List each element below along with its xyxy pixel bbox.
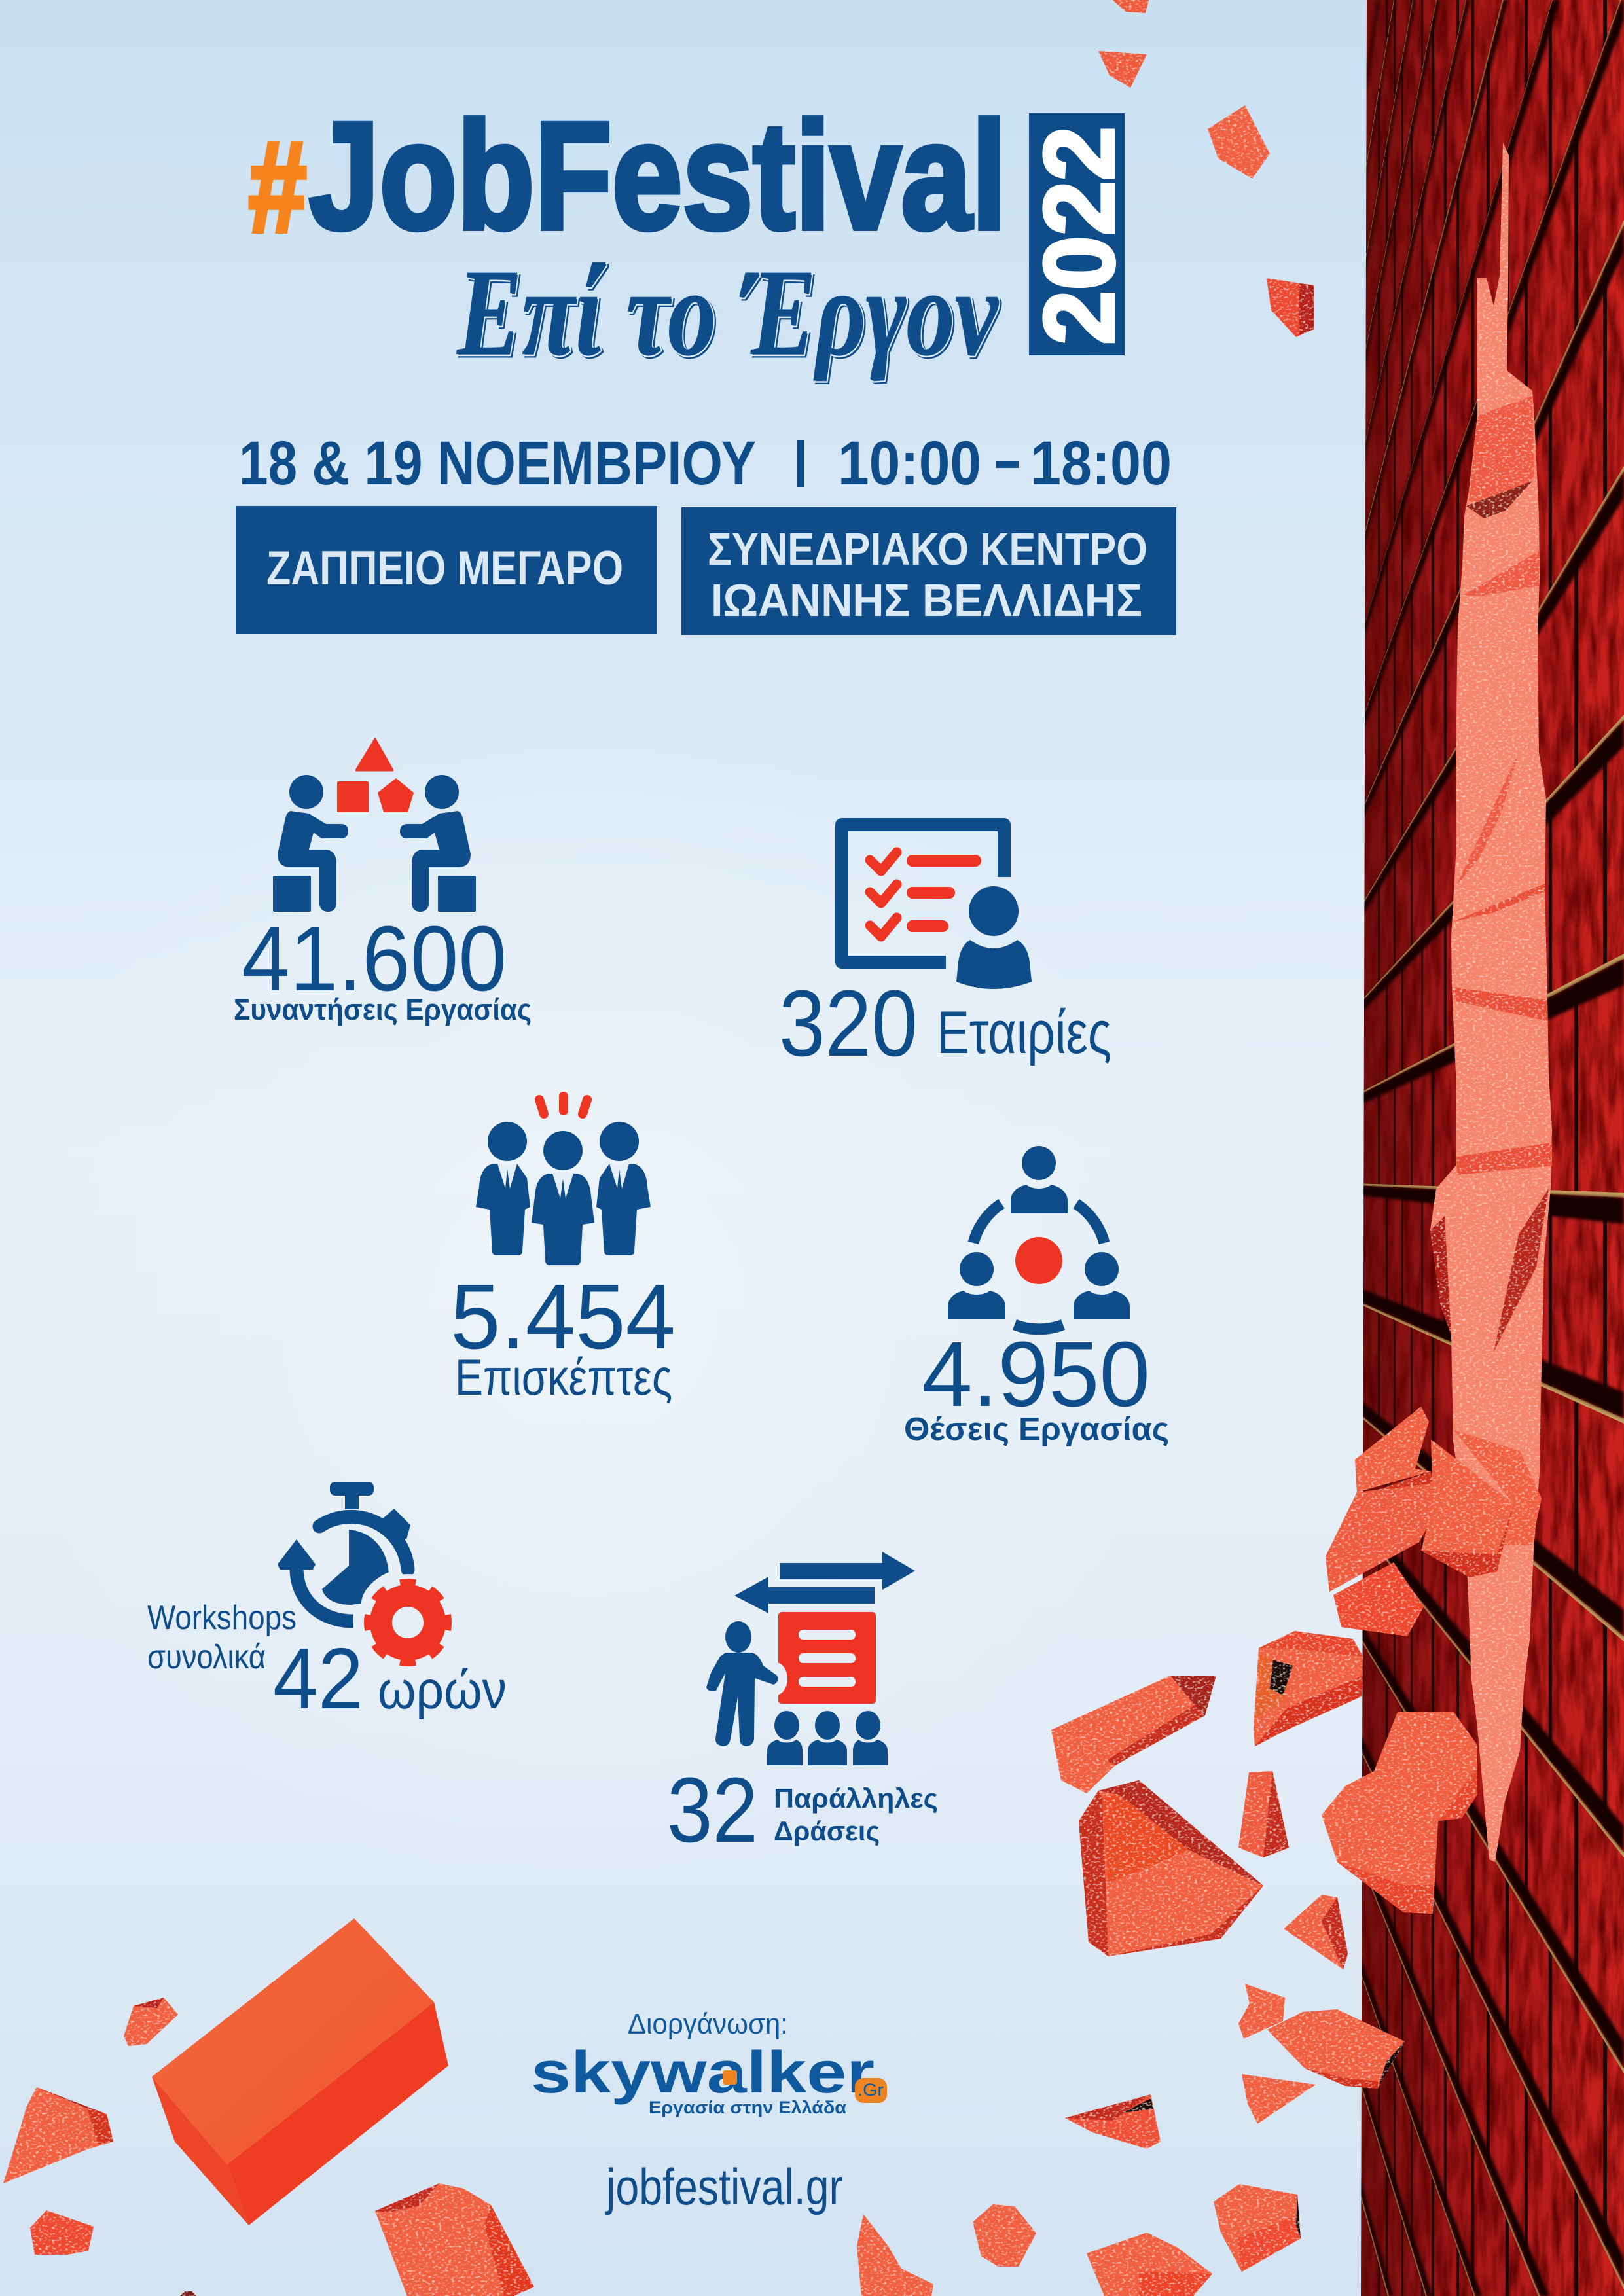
logo: skywalker: .Gr xyxy=(857,2080,884,2100)
stat: 32 parallel activities: Παράλληλες xyxy=(774,1783,938,1814)
logo: skywalker: Εργασία στην Ελλάδα xyxy=(649,2098,846,2117)
stat: 4.950 job positions: 4.950 xyxy=(922,1322,1150,1426)
venue box: Ζάππειο: ΖΑΠΠΕΙΟ ΜΕΓΑΡΟ xyxy=(266,542,623,595)
year badge 2022: 2022 xyxy=(1024,126,1135,345)
date and time: 18:00 xyxy=(1030,429,1172,498)
stat: 5.454 visitors: 5.454 xyxy=(450,1265,676,1368)
date and time xyxy=(239,429,1172,498)
stat: 320 companies: 320 xyxy=(779,971,918,1076)
venue box: Βελλίδης: ΙΩΑΝΝΗΣ ΒΕΛΛΙΔΗΣ xyxy=(711,575,1142,626)
stat: 4.950 job positions: Θέσεις Εργασίας xyxy=(904,1412,1169,1447)
stat: 42 hours of workshops: Workshops xyxy=(147,1599,297,1637)
stat: 32 parallel activities xyxy=(667,1758,938,1861)
stat: 42 hours of workshops: ωρών xyxy=(378,1660,507,1720)
stat: 32 parallel activities: 32 xyxy=(667,1758,758,1861)
stat: 320 companies xyxy=(779,971,1111,1076)
venue box: Βελλίδης xyxy=(681,507,1176,635)
stat: 5.454 visitors: Επισκέπτες xyxy=(455,1348,672,1406)
icon: parallel activities xyxy=(706,1552,915,1765)
stat: 42 hours of workshops xyxy=(147,1599,507,1727)
logo: skywalker: skywalker xyxy=(531,2040,875,2106)
stat: 32 parallel activities: Δράσεις xyxy=(774,1816,880,1846)
subtitle: Επί το Έργον: Επί το Έργον xyxy=(457,245,1000,383)
icon: job meetings xyxy=(273,739,476,912)
title: #JobFestival: # xyxy=(249,116,306,259)
logo: skywalker xyxy=(531,2040,887,2117)
icon: job positions network xyxy=(948,1146,1130,1329)
large falling brick xyxy=(152,1918,448,2225)
brick wall xyxy=(1361,0,1624,2296)
stat: 41.600: Συναντήσεις Εργασίας xyxy=(234,993,532,1026)
venue box: Ζάππειο xyxy=(236,506,657,634)
stat: 320 companies: Εταιρίες xyxy=(937,999,1111,1066)
icon: visitors xyxy=(476,1096,651,1265)
stat: 42 hours of workshops: 42 xyxy=(273,1630,363,1727)
icon: stopwatch and gear xyxy=(278,1482,456,1671)
website: jobfestival.gr xyxy=(605,2158,843,2215)
subtitle: Επί το Έργον: Επί το Έργον xyxy=(458,247,1001,384)
organiser label: Διοργάνωση: xyxy=(628,2008,788,2040)
date and time: 10:00 xyxy=(838,429,981,498)
title: #JobFestival: JobFestival xyxy=(309,91,1007,261)
wall crack xyxy=(1430,143,1552,1862)
icon: companies checklist xyxy=(842,825,1032,989)
venue box: Βελλίδης: ΣΥΝΕΔΡΙΑΚΟ ΚΕΝΤΡΟ xyxy=(708,524,1147,575)
date and time: 18 & 19 ΝΟΕΜΒΡΙΟΥ xyxy=(239,429,756,498)
stat: 41.600: 41.600 xyxy=(242,906,507,1010)
stat: 42 hours of workshops: συνολικά xyxy=(147,1638,266,1676)
subtitle: Επί το Έργον: Επί το Έργον xyxy=(456,244,998,382)
